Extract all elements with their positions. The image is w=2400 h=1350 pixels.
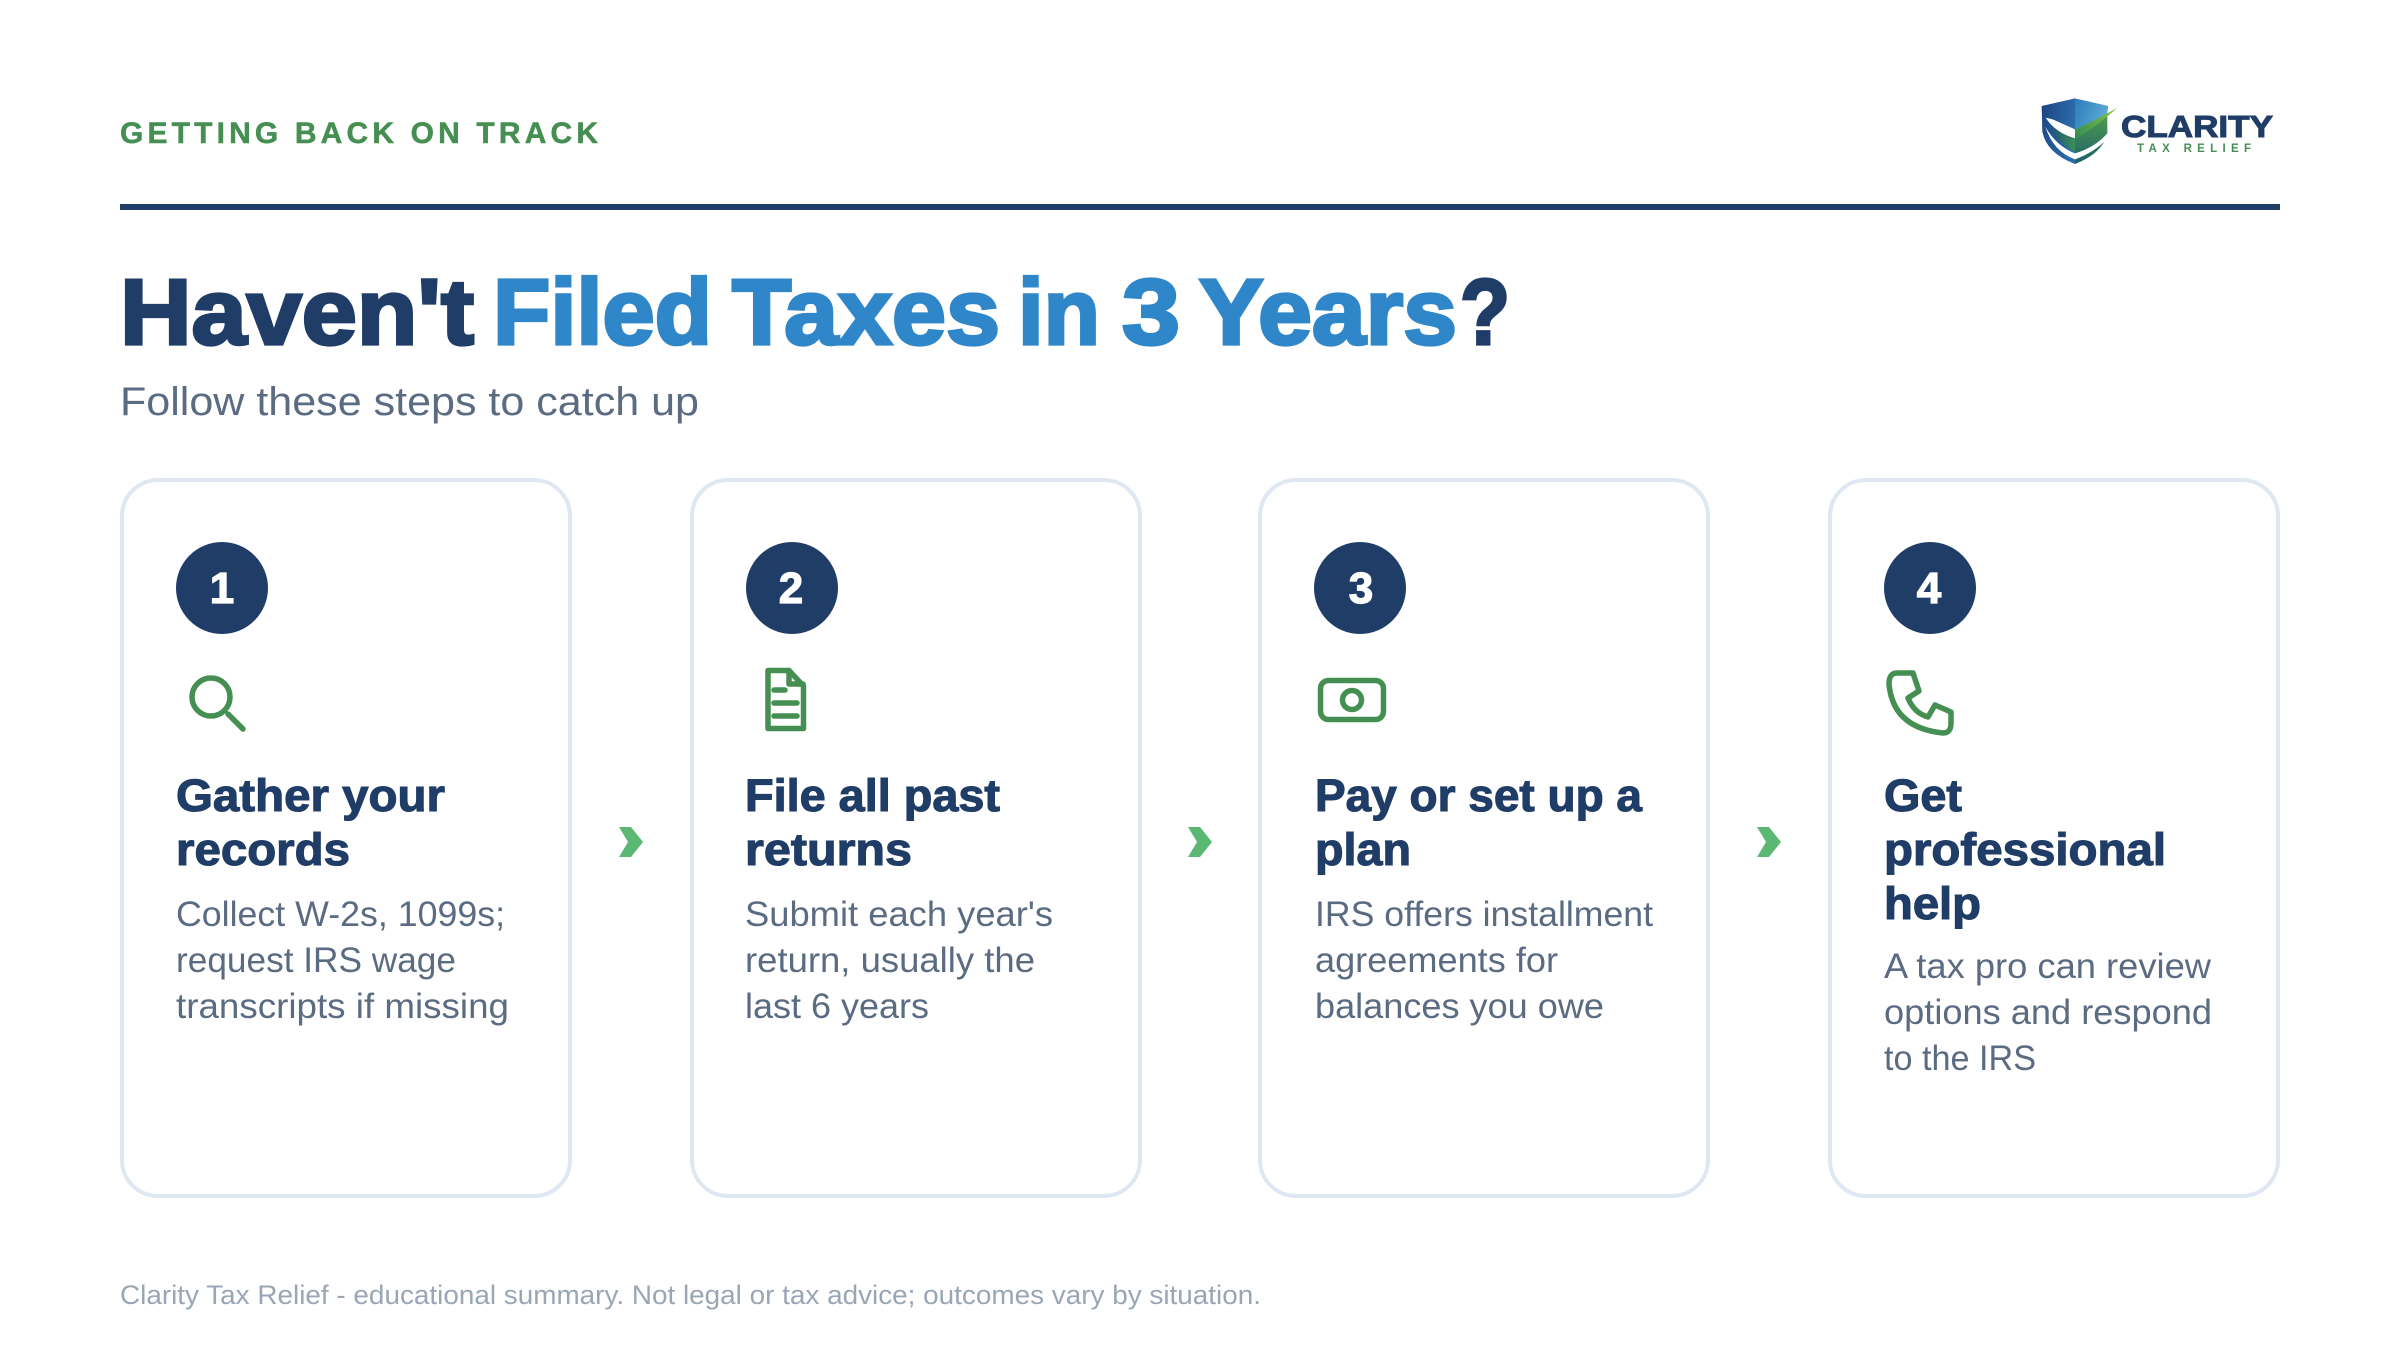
- panel: step 3 pay or set up a plan: [1260, 480, 1708, 1196]
- heading: file all past returns: returns: [745, 824, 912, 875]
- body text: step 2: Submit each year's: [745, 895, 1053, 934]
- step number 2: 2: [779, 564, 803, 613]
- icon: document: [768, 670, 804, 728]
- step number 1: [176, 542, 268, 634]
- arrow 1: [619, 827, 643, 857]
- heading: gather your records: Gather your: [176, 770, 445, 821]
- heading: get professional help: professional: [1884, 824, 2166, 875]
- body text: step 4: [1884, 947, 2212, 1078]
- logo: Clarity Tax Relief: [2042, 98, 2273, 164]
- body text: step 1: request IRS wage: [176, 941, 456, 980]
- icon: money bill: [1320, 680, 1384, 720]
- step number 1: 1: [210, 564, 234, 613]
- heading: gather your records: records: [176, 824, 350, 875]
- heading: pay or set up a plan: plan: [1315, 824, 1411, 875]
- heading: pay or set up a plan: [1315, 770, 1643, 875]
- heading: file all past returns: File all past: [745, 770, 1000, 821]
- panel: step 2 file all past returns: [692, 480, 1140, 1196]
- title: 3: [1122, 260, 1180, 364]
- panel: step 4 get professional help: [1830, 480, 2278, 1196]
- step number 3: [1314, 542, 1406, 634]
- heading: get professional help: Get: [1884, 770, 1962, 821]
- body text: step 1: [176, 895, 509, 1026]
- step number 4: 4: [1917, 564, 1942, 613]
- heading: gather your records: [176, 770, 445, 875]
- title: in: [1018, 260, 1100, 364]
- body text: step 2: [745, 895, 1053, 1026]
- heading: get professional help: [1884, 770, 2166, 929]
- arrow 2: [1188, 827, 1212, 857]
- step number 3: 3: [1349, 564, 1373, 613]
- title: ?: [1460, 260, 1510, 364]
- subtitle: Follow these steps to catch up: [120, 380, 699, 424]
- title: Filed: [493, 260, 712, 364]
- body text: step 3: IRS offers installment: [1315, 895, 1653, 934]
- body text: step 4: options and respond: [1884, 993, 2212, 1032]
- body text: step 1: Collect W-2s, 1099s;: [176, 895, 505, 934]
- heading: pay or set up a plan: Pay or set up a: [1315, 770, 1643, 821]
- body text: step 3: [1315, 895, 1653, 1026]
- body text: step 3: agreements for: [1315, 941, 1558, 980]
- heading: get professional help: help: [1884, 878, 1981, 929]
- step number 2: [746, 542, 838, 634]
- eyebrow: getting back on track: GETTING BACK ON TRACK: [120, 117, 598, 150]
- logo wordmark: CLARITY: [2121, 109, 2273, 144]
- body text: step 1: transcripts if missing: [176, 987, 509, 1026]
- body text: step 4: A tax pro can review: [1884, 947, 2212, 986]
- arrow 3: [1757, 827, 1781, 857]
- body text: step 4: to the IRS: [1884, 1039, 2036, 1078]
- title: Taxes: [732, 260, 1000, 364]
- heading: file all past returns: [745, 770, 1000, 875]
- body text: step 2: last 6 years: [745, 987, 929, 1026]
- logo tagline: TAX RELIEF: [2137, 143, 2251, 155]
- title: Haven't: [120, 260, 474, 364]
- step number 4: [1884, 542, 1976, 634]
- icon: phone: [1889, 673, 1951, 733]
- panel: step 1 gather your records: [122, 480, 570, 1196]
- body text: step 3: balances you owe: [1315, 987, 1604, 1026]
- icon: magnifying glass: [192, 678, 243, 729]
- body text: step 2: return, usually the: [745, 941, 1035, 980]
- icon: logo shield: [2042, 98, 2117, 164]
- footer disclaimer: Clarity Tax Relief - educational summary. Not legal or tax advice; outcomes vary by situation.: [120, 1280, 1261, 1310]
- title: Years: [1199, 260, 1457, 364]
